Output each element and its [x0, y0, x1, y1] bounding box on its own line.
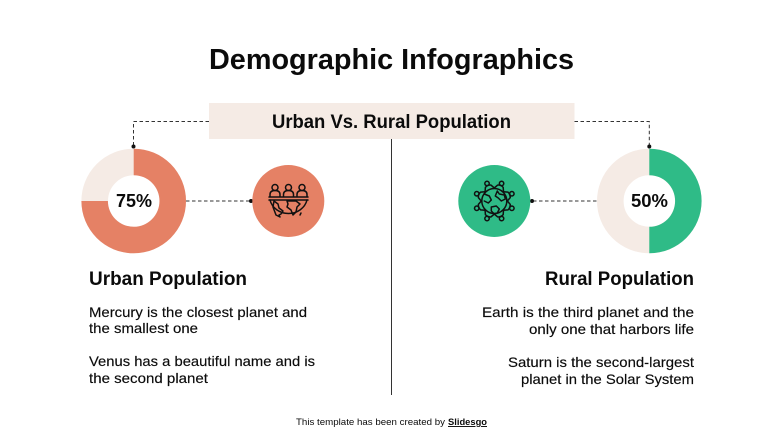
text: saturn: planet in the Solar System	[521, 371, 694, 387]
text: venus	[89, 353, 315, 386]
icon: people around globe	[458, 165, 530, 237]
title: Demographic Infographics	[209, 44, 574, 76]
subtitle banner: Urban Vs. Rural Population	[272, 112, 511, 133]
text: saturn: Saturn is the second-largest	[508, 354, 694, 370]
text: earth: only one that harbors life	[529, 321, 694, 337]
urban donut chart 75%	[81, 149, 186, 253]
panel: rural population text	[482, 269, 694, 387]
footer credit: This template has been created by	[296, 417, 445, 428]
text: saturn	[508, 354, 694, 387]
text: mercury: Mercury is the closest planet and	[89, 304, 307, 320]
text: earth: Earth is the third planet and the	[482, 304, 694, 320]
center divider line	[390, 139, 392, 395]
heading: rural population: Rural Population	[545, 269, 694, 290]
subtitle banner	[209, 103, 574, 139]
connector: banner to rural donut	[574, 122, 651, 148]
connector: rural donut to icon	[530, 199, 597, 203]
text: earth	[482, 304, 694, 337]
panel: urban population text	[89, 269, 315, 386]
text: mercury: the smallest one	[89, 320, 198, 336]
urban donut chart 75%: 75%	[116, 191, 152, 211]
icon: people over globe	[252, 165, 324, 237]
connector: urban donut to icon	[186, 199, 253, 203]
text: mercury	[89, 304, 307, 336]
text: venus: the second planet	[89, 370, 208, 386]
text: venus: Venus has a beautiful name and is	[89, 353, 315, 369]
heading: urban population: Urban Population	[89, 269, 247, 290]
rural donut chart 50%: 50%	[631, 191, 668, 211]
connector: banner to urban donut	[132, 122, 209, 148]
rural donut chart 50%	[610, 149, 702, 253]
footer credit: Slidesgo	[448, 417, 487, 428]
